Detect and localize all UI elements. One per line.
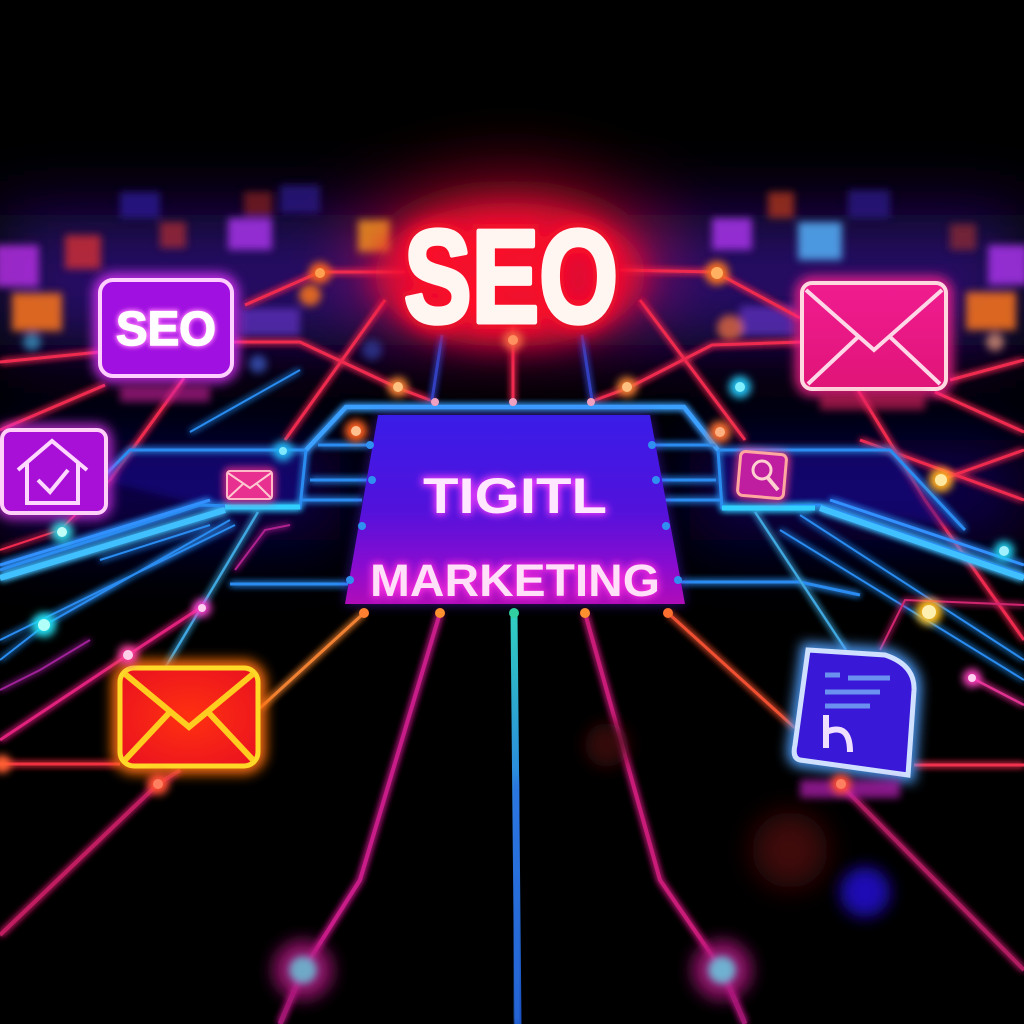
connection lines: lower pink/orange	[0, 525, 1024, 1024]
connector nodes	[0, 261, 1014, 795]
ambient glow band	[0, 180, 1024, 540]
heading: SEO: SEO	[404, 203, 618, 350]
icon: SEO badge	[100, 280, 232, 402]
heading: SEO: SEO	[404, 203, 618, 350]
icon: small envelope	[227, 471, 272, 499]
panel text: TIGITL: TIGITL	[423, 468, 607, 524]
icon: house check	[2, 430, 106, 513]
panel text: TIGITL: TIGITL	[423, 468, 607, 524]
panel text: MARKETING: MARKETING	[370, 555, 660, 606]
central panel: digital marketing	[345, 415, 685, 606]
center vertical line	[514, 613, 518, 1024]
icon: document lower right	[794, 650, 914, 798]
icon: small search tile	[737, 451, 787, 499]
connection lines: upper red network	[0, 270, 1024, 640]
blurred background tiles	[0, 185, 1024, 373]
wing fills beside the panel	[100, 450, 965, 530]
connection lines: blue circuit	[0, 335, 1024, 680]
icon: envelope lower left	[120, 668, 258, 766]
icon: SEO badge: SEO	[116, 303, 216, 356]
blurred bottom nodes	[273, 723, 890, 1000]
panel text: MARKETING: MARKETING	[370, 555, 660, 606]
icon: SEO badge: SEO	[116, 303, 216, 356]
icon: envelope top right	[802, 283, 946, 410]
